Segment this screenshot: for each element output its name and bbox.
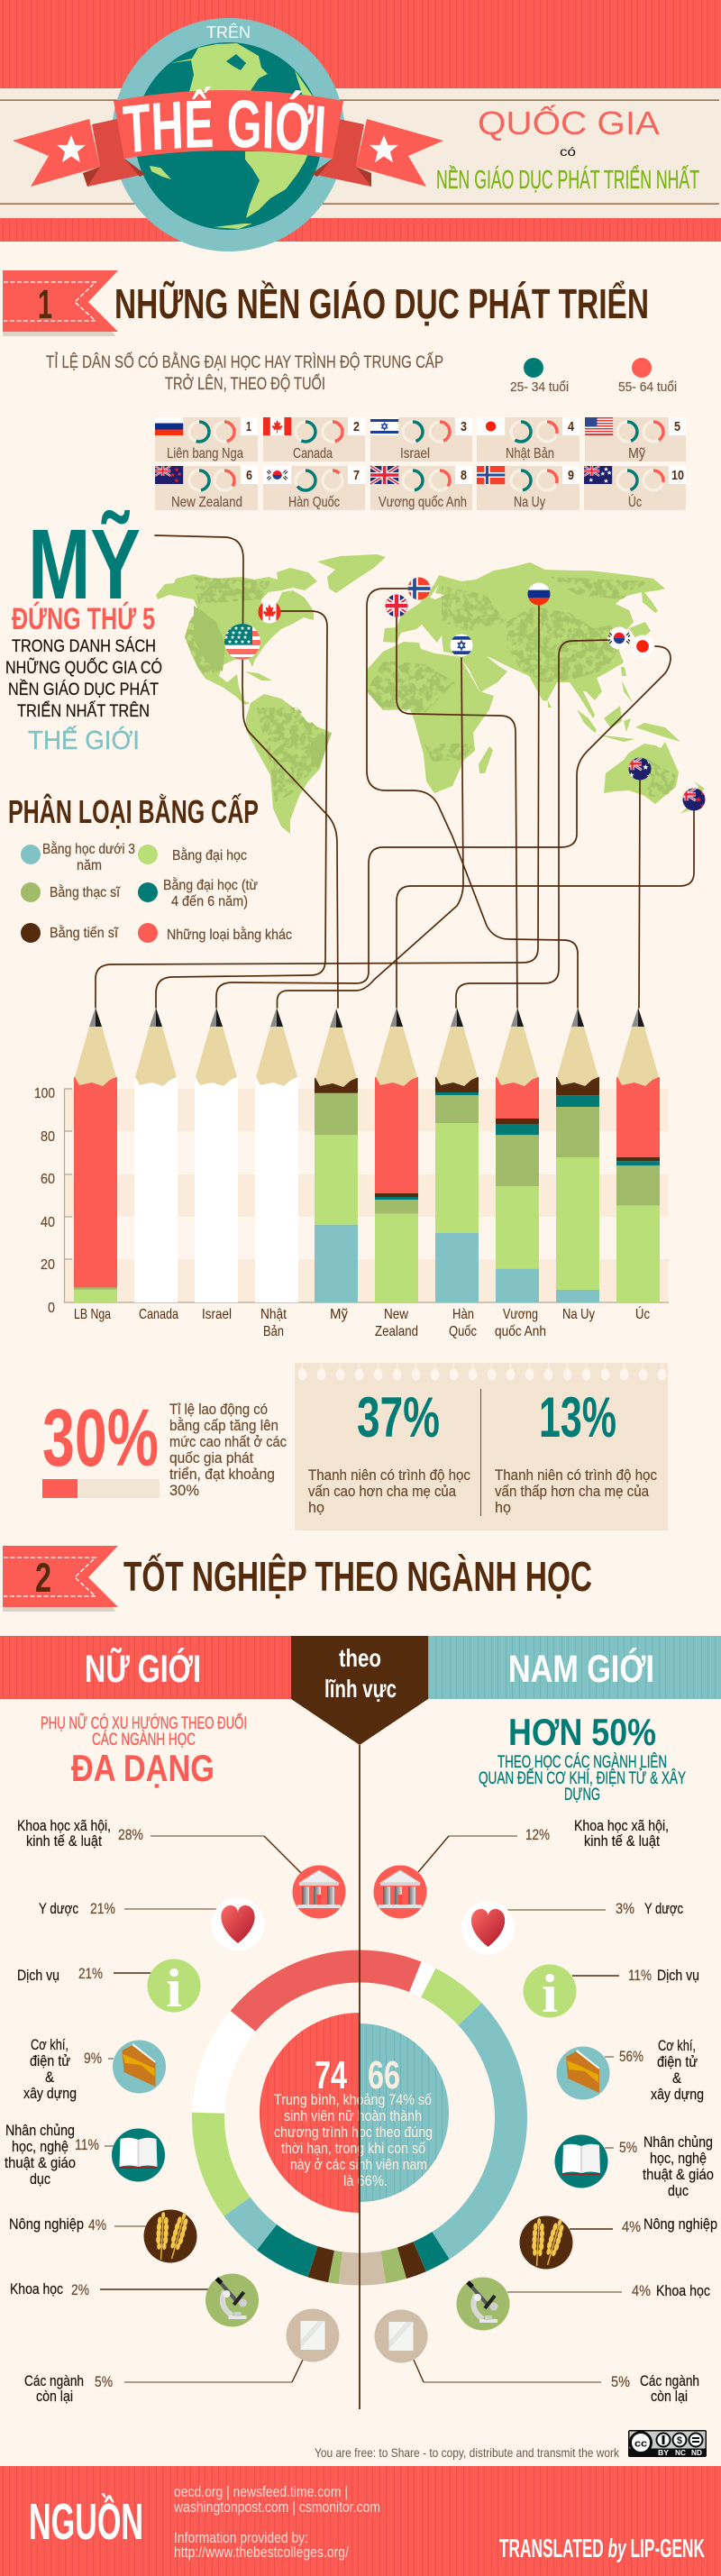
text: source list: oecd.org | newsfeed.time.com | bbox=[174, 2483, 348, 2500]
center circle: completion rate bbox=[260, 2013, 449, 2213]
axis labels: 60 bbox=[41, 1172, 55, 1187]
chart category labels: Israel bbox=[202, 1307, 232, 1322]
men headline: DỰNG bbox=[564, 1786, 600, 1804]
legend: degree types: Bằng đại học bbox=[172, 846, 247, 863]
card: Russia bbox=[155, 417, 258, 461]
row: services, men: 11% bbox=[628, 1967, 652, 1984]
heading block: Mỹ đứng thứ 5: MỸ bbox=[28, 509, 141, 620]
chart category labels: Nhật bbox=[260, 1307, 287, 1322]
pencil: Úc bbox=[616, 1008, 660, 1302]
chart category labels: Úc bbox=[635, 1305, 650, 1322]
chart category labels: Quốc bbox=[449, 1324, 477, 1339]
row: engineering, women: & bbox=[45, 2069, 55, 2086]
card: Japan bbox=[477, 417, 580, 461]
row: science, men bbox=[456, 2277, 710, 2331]
pin: UK bbox=[386, 595, 407, 617]
row: services, women bbox=[17, 1959, 200, 2018]
license note: You are free: to Share - to copy, distribute and transmit the work bbox=[315, 2445, 620, 2460]
chart category labels: Hàn bbox=[452, 1307, 474, 1322]
ribbon bbox=[13, 87, 443, 187]
row: engineering, men: điện tử bbox=[657, 2053, 698, 2070]
pin: New Zealand bbox=[683, 788, 705, 811]
row: medicine, women: 21% bbox=[90, 1900, 115, 1917]
row: science, women: 2% bbox=[71, 2281, 89, 2298]
women headline: CÁC NGÀNH HỌC bbox=[92, 1731, 196, 1749]
women headline bbox=[41, 1713, 247, 1789]
axis labels: 80 bbox=[41, 1129, 55, 1145]
row: science, men: Khoa học bbox=[656, 2282, 710, 2299]
card: Canada bbox=[263, 417, 365, 461]
pin: Russia bbox=[528, 582, 550, 606]
men headline bbox=[479, 1711, 686, 1804]
row: agriculture, men: 4% bbox=[622, 2218, 641, 2235]
heading: phân loại bằng cấp: PHÂN LOẠI BẰNG CẤP bbox=[8, 792, 259, 830]
donut: men bbox=[146, 1904, 573, 2332]
row: services, men bbox=[523, 1964, 699, 2023]
text: 30% description: triển, đạt khoảng bbox=[169, 1466, 275, 1483]
pin: Canada bbox=[258, 600, 281, 624]
pin: Japan bbox=[631, 635, 654, 658]
icon: creative commons badge: BY bbox=[658, 2449, 670, 2457]
row: other, women: 5% bbox=[95, 2373, 113, 2390]
row: engineering, women: điện tử bbox=[30, 2052, 70, 2069]
pencil: Hàn Quốc bbox=[435, 1008, 479, 1302]
legend: degree types: Bằng tiến sĩ bbox=[50, 924, 119, 941]
pencil: Mỹ bbox=[315, 1009, 358, 1302]
legend: degree types: Bằng thạc sĩ bbox=[50, 883, 121, 900]
stat: 37%: họ bbox=[308, 1499, 324, 1516]
globe bbox=[112, 18, 345, 251]
header banner: striped background bbox=[0, 0, 721, 242]
text: 30% description bbox=[169, 1401, 287, 1499]
map shading bbox=[185, 577, 676, 802]
chart category labels: Mỹ bbox=[330, 1307, 348, 1322]
stat: 30%: 30% bbox=[42, 1393, 159, 1484]
subtitle: TRỞ LÊN, THEO ĐỘ TUỔI bbox=[165, 374, 325, 394]
row: humanities, women bbox=[5, 2122, 165, 2188]
footer: sources bbox=[0, 2466, 721, 2576]
heading: THẾ GIỚI: THẾ GIỚI bbox=[123, 87, 324, 153]
heading block: Mỹ đứng thứ 5: THẾ GIỚI bbox=[28, 725, 140, 755]
row: services, men: i bbox=[542, 1964, 558, 2023]
row: humanities, men: 5% bbox=[619, 2139, 637, 2156]
card: Russia: 1 bbox=[246, 419, 251, 434]
card: Israel: Israel bbox=[400, 446, 430, 461]
row: social sciences, men: kinh tế & luật bbox=[584, 1832, 660, 1850]
text: source list: washingtonpost.com | csmonitor.com bbox=[173, 2498, 380, 2516]
row: social sciences, women: 28% bbox=[118, 1826, 143, 1843]
axis labels: 20 bbox=[41, 1257, 55, 1273]
stat: 13%: họ bbox=[495, 1499, 511, 1516]
stat: 37%: 37% bbox=[357, 1386, 440, 1449]
section 1 heading: 1 bbox=[38, 281, 52, 327]
card: Australia: 10 bbox=[671, 468, 684, 483]
legend: degree types: Bằng học dưới 3 bbox=[42, 840, 135, 857]
row: engineering, men: xây dựng bbox=[651, 2086, 704, 2103]
text: 30% description: quốc gia phát bbox=[169, 1449, 253, 1466]
subtitle bbox=[46, 352, 443, 394]
stat: 37%: Thanh niên có trình độ học bbox=[308, 1466, 470, 1484]
row: engineering, women: 9% bbox=[84, 2050, 102, 2067]
legend: degree types: Những loại bằng khác bbox=[167, 926, 292, 943]
card: USA: Mỹ bbox=[628, 446, 645, 461]
legend: degree types bbox=[21, 840, 292, 943]
women headline: PHỤ NỮ CÓ XU HƯỚNG THEO ĐUỔI bbox=[41, 1713, 247, 1733]
men headline: HƠN 50% bbox=[508, 1711, 656, 1753]
heading block: Mỹ đứng thứ 5 bbox=[5, 509, 162, 755]
stat: 13%: vấn thấp hơn cha mẹ của bbox=[495, 1483, 649, 1500]
card: Australia bbox=[584, 466, 686, 510]
card: United Kingdom: Vương quốc Anh bbox=[379, 495, 467, 510]
icon: creative commons badge: $ bbox=[677, 2435, 682, 2446]
heading block: Mỹ đứng thứ 5: NHỮNG QUỐC GIA CÓ bbox=[5, 658, 162, 678]
chart category labels: LB Nga bbox=[74, 1307, 111, 1322]
card: New Zealand: New Zealand bbox=[171, 495, 242, 510]
card: USA bbox=[585, 417, 686, 461]
row: engineering, women bbox=[23, 2036, 166, 2102]
subtitle: TỈ LỆ DÂN SỐ CÓ BẰNG ĐẠI HỌC HAY TRÌNH ĐỘ TRUNG CẤP bbox=[46, 352, 443, 372]
legend: age groups: 55- 64 tuổi bbox=[618, 379, 677, 395]
pencil: Na Uy bbox=[556, 1008, 599, 1302]
row: science, women bbox=[10, 2273, 259, 2327]
section 1 heading bbox=[3, 270, 649, 336]
row: medicine, men: Y dược bbox=[644, 1900, 683, 1917]
row: humanities, men bbox=[555, 2133, 714, 2199]
row: humanities, men: dục bbox=[668, 2182, 689, 2199]
chart category labels: quốc Anh bbox=[495, 1324, 546, 1339]
row: other, women: Các ngành bbox=[24, 2372, 84, 2389]
chart category labels: Vương bbox=[503, 1307, 538, 1322]
row: social sciences, women: kinh tế & luật bbox=[26, 1832, 102, 1850]
pencil: LB Nga bbox=[74, 1008, 117, 1302]
card: New Zealand: 6 bbox=[246, 468, 252, 483]
pencil: Israel bbox=[195, 1008, 238, 1302]
row: services, women: 21% bbox=[78, 1965, 103, 1982]
card: South Korea: Hàn Quốc bbox=[288, 495, 340, 510]
heading block: Mỹ đứng thứ 5: TRONG DANH SÁCH bbox=[12, 637, 156, 656]
stat: 37%: vấn cao hơn cha mẹ của bbox=[308, 1483, 456, 1500]
pin: Israel bbox=[451, 635, 472, 656]
card: Israel bbox=[370, 417, 472, 461]
row: social sciences, women bbox=[17, 1817, 346, 1918]
text: 30% description: bằng cấp tăng lên bbox=[169, 1417, 278, 1434]
gender header: NỮ GIỚI bbox=[85, 1647, 201, 1691]
row: engineering, women: xây dựng bbox=[23, 2085, 77, 2102]
row: other, men bbox=[375, 2309, 699, 2405]
chart category labels: Bản bbox=[263, 1324, 284, 1339]
row: medicine, women bbox=[39, 1898, 265, 1950]
axis labels: 0 bbox=[48, 1301, 55, 1316]
chart category labels: Canada bbox=[139, 1307, 178, 1322]
stat: 13%: 13% bbox=[539, 1386, 616, 1449]
card: Canada: Canada bbox=[293, 446, 333, 461]
stat: 37% bbox=[308, 1386, 470, 1516]
card: United Kingdom bbox=[370, 466, 472, 510]
panel: parents comparison bbox=[295, 1363, 668, 1530]
legend: age groups bbox=[510, 358, 677, 395]
card: United Kingdom: 8 bbox=[461, 468, 467, 483]
row: social sciences, men: Khoa học xã hội, bbox=[574, 1817, 669, 1834]
card: Israel: 3 bbox=[461, 419, 467, 434]
row: social sciences, women: Khoa học xã hội, bbox=[17, 1817, 111, 1834]
pin: Korea bbox=[607, 627, 631, 649]
card: South Korea bbox=[263, 466, 365, 510]
center circle: completion rate: là 66%. bbox=[343, 2172, 388, 2189]
row: medicine, men: 3% bbox=[616, 1900, 634, 1917]
text: source list: http://www.thebestcolleges.org/ bbox=[174, 2544, 349, 2561]
chart category labels: New bbox=[384, 1307, 408, 1322]
row: agriculture, women bbox=[9, 2210, 196, 2262]
title text: quốc gia bbox=[436, 104, 699, 195]
row: engineering, men: 56% bbox=[619, 2048, 643, 2065]
row: humanities, men: học, nghệ bbox=[650, 2150, 707, 2167]
gender header: lĩnh vực bbox=[324, 1675, 397, 1703]
row: social sciences, men: 12% bbox=[525, 1826, 550, 1843]
pencil: Vương quốc Anh bbox=[496, 1008, 539, 1302]
text: 30% description: Tỉ lệ lao động có bbox=[169, 1401, 268, 1418]
stat: 13% bbox=[495, 1386, 657, 1516]
center circle: completion rate: này ở các sinh viên nam bbox=[290, 2156, 427, 2173]
row: agriculture, women: Nông nghiệp bbox=[9, 2215, 84, 2233]
row: services, men: Dịch vụ bbox=[657, 1967, 699, 1984]
icon: creative commons badge: cc bbox=[634, 2439, 647, 2450]
card: Norway: Na Uy bbox=[514, 495, 545, 510]
text: 30% description: mức cao nhất ở các bbox=[169, 1433, 287, 1450]
row: other, men: 5% bbox=[611, 2373, 630, 2390]
gender header: NAM GIỚI bbox=[508, 1647, 654, 1691]
icon: creative commons badge: ND bbox=[691, 2449, 702, 2457]
section 2 heading bbox=[3, 1546, 592, 1612]
axis labels bbox=[34, 1086, 55, 1316]
card: South Korea: 7 bbox=[353, 468, 360, 483]
row: medicine, women: Y dược bbox=[39, 1900, 78, 1917]
center circle: completion rate: chương trình học theo đúng bbox=[274, 2124, 433, 2141]
row: engineering, men: Cơ khí, bbox=[658, 2037, 696, 2054]
card: Norway bbox=[477, 466, 580, 510]
card: Norway: 9 bbox=[568, 468, 574, 483]
card: Japan: 4 bbox=[568, 419, 575, 434]
chart category labels: Na Uy bbox=[562, 1307, 595, 1322]
row: medicine, men bbox=[461, 1900, 683, 1954]
chart category labels: Zealand bbox=[375, 1324, 418, 1339]
pencil: New Zealand bbox=[375, 1008, 418, 1302]
gender header: theo bbox=[339, 1644, 381, 1672]
women headline: ĐA DẠNG bbox=[71, 1747, 214, 1789]
card: Australia: Úc bbox=[628, 493, 642, 510]
row: science, women: Khoa học bbox=[10, 2280, 63, 2297]
map flag pins bbox=[215, 577, 711, 811]
center circle: completion rate: sinh viên nữ hoàn thành bbox=[284, 2107, 422, 2124]
gender header bbox=[0, 1636, 721, 1745]
card: Canada: 2 bbox=[353, 419, 360, 434]
connector lines from flags to pencils bbox=[96, 535, 694, 1008]
card: Russia: Liên bang Nga bbox=[167, 446, 243, 461]
legend: degree types: 4 đến 6 năm) bbox=[171, 894, 248, 909]
footer: sources: NGUỒN bbox=[29, 2492, 143, 2551]
stat: 30% bbox=[42, 1393, 287, 1499]
axis labels: 100 bbox=[34, 1086, 55, 1101]
heading block: Mỹ đứng thứ 5: NỀN GIÁO DỤC PHÁT bbox=[8, 680, 159, 699]
title text: quốc gia: QUỐC GIA bbox=[478, 104, 660, 142]
center circle: completion rate: 74 bbox=[315, 2053, 347, 2097]
row: agriculture, women: 4% bbox=[88, 2216, 106, 2233]
donut: women bbox=[146, 1905, 573, 2331]
legend: degree types: năm bbox=[77, 858, 102, 873]
center circle: completion rate: Trung bình, khoảng 74% số bbox=[274, 2091, 432, 2108]
row: services, women: Dịch vụ bbox=[17, 1967, 59, 1984]
stat: 13%: Thanh niên có trình độ học bbox=[495, 1466, 657, 1484]
legend: age groups: 25- 34 tuổi bbox=[510, 379, 569, 395]
icon: creative commons badge: NC bbox=[675, 2449, 686, 2457]
row: humanities, women: Nhân chủng bbox=[5, 2122, 75, 2139]
row: engineering, men bbox=[557, 2037, 704, 2103]
heading block: Mỹ đứng thứ 5: ĐỨNG THỨ 5 bbox=[12, 602, 155, 636]
pin: Australia bbox=[629, 757, 651, 781]
heading block: Mỹ đứng thứ 5: TRIỂN NHẤT TRÊN bbox=[17, 701, 150, 721]
center circle: completion rate: 66 bbox=[368, 2053, 400, 2097]
section 2 heading: 2 bbox=[35, 1555, 51, 1601]
pin: USA bbox=[224, 624, 260, 660]
row: humanities, women: thuật & giáo bbox=[5, 2154, 76, 2171]
row: engineering, men: & bbox=[672, 2069, 682, 2087]
legend: degree types: Bằng đại học (từ bbox=[163, 876, 258, 893]
row: engineering, women: Cơ khí, bbox=[31, 2036, 68, 2053]
row: humanities, women: dục bbox=[30, 2170, 50, 2188]
center circle: completion rate: thời hạn, trong khi con số bbox=[281, 2140, 425, 2157]
text: source list bbox=[173, 2483, 380, 2561]
title text: quốc gia: có bbox=[560, 144, 576, 159]
row: humanities, women: 11% bbox=[75, 2136, 99, 2153]
row: other, women bbox=[24, 2309, 339, 2405]
icon: creative commons badge bbox=[628, 2430, 707, 2457]
card: New Zealand bbox=[155, 466, 258, 510]
heading: TRÊN: TRÊN bbox=[206, 23, 251, 41]
row: agriculture, men bbox=[519, 2215, 717, 2270]
row: other, men: Các ngành bbox=[640, 2372, 699, 2389]
axis labels: 40 bbox=[41, 1215, 55, 1230]
text: 30% description: 30% bbox=[169, 1482, 199, 1499]
row: science, men: 4% bbox=[632, 2282, 651, 2299]
country cards bbox=[155, 417, 686, 510]
row: social sciences, men bbox=[373, 1817, 669, 1918]
card: Japan: Nhật Bản bbox=[506, 446, 554, 461]
row: other, men: còn lại bbox=[651, 2388, 688, 2405]
pencil bar chart bbox=[34, 1008, 669, 1339]
world map bbox=[156, 554, 705, 834]
text: source list: Information provided by: bbox=[174, 2529, 308, 2546]
chart category labels bbox=[74, 1305, 650, 1339]
pencil: Canada bbox=[134, 1008, 178, 1302]
row: humanities, women: học, nghệ bbox=[12, 2138, 68, 2155]
pin: Norway bbox=[407, 577, 431, 600]
card: USA: 5 bbox=[674, 419, 680, 434]
pencil: Nhật Bản bbox=[255, 1008, 298, 1302]
row: services, women: i bbox=[166, 1959, 182, 2018]
row: other, women: còn lại bbox=[36, 2388, 73, 2405]
donut chart bbox=[146, 1904, 573, 2332]
center divider line bbox=[359, 1745, 360, 2409]
